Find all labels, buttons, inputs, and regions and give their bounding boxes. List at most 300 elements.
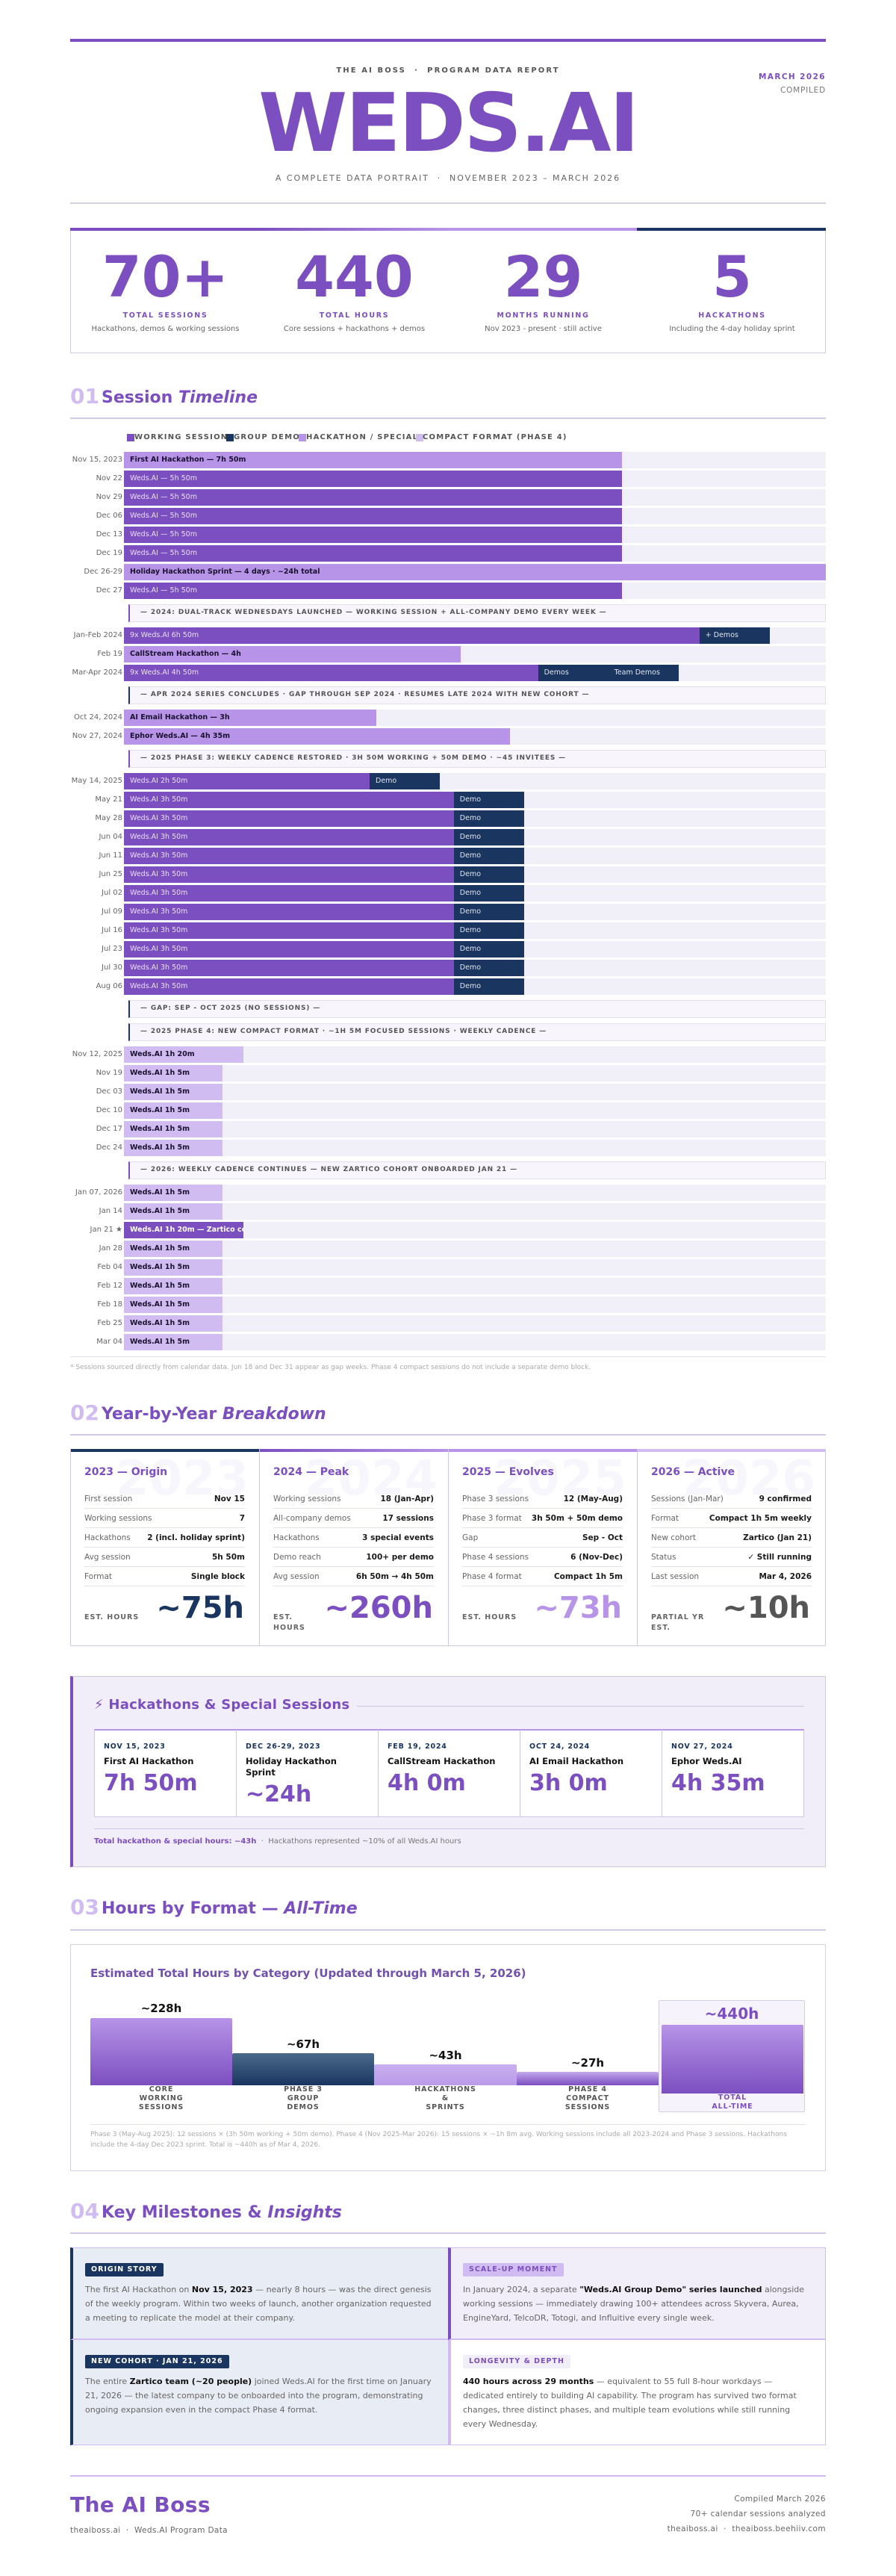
estimated hours label: EST. HOURS [84,1613,139,1621]
panel: 2023 origin: Avg session [84,1553,131,1562]
timeline row: Feb 12 [70,1278,826,1294]
body text: The entire Zartico team (~20 people) joined Weds.AI for the first time on January [85,2377,432,2386]
bar: total all-time: TOTAL [718,2094,747,2102]
timeline row: Nov 27, 2024: Nov 27, 2024 [72,732,122,740]
panel: 2024 peak: Avg session [273,1572,320,1581]
heading: section 04: Key Milestones & Insights [102,2203,342,2222]
bar: hackathons and sprints: ~43h [429,2049,462,2062]
timeline row: May 14, 2025 [72,773,826,789]
panel: 2024 peak: Working sessions [273,1495,341,1503]
card: first AI hackathon [94,1729,237,1817]
body text: a meeting to replicate the model at their company. [85,2313,295,2323]
tag [463,2263,564,2276]
panel: 2023 origin [70,1449,260,1646]
timeline row: Jul 16: Weds.AI 3h 50m [130,926,187,934]
card: ephor: NOV 27, 2024 [671,1742,733,1751]
panel: 2025 evolves [448,1449,638,1646]
timeline row: Jun 04: Weds.AI 3h 50m [130,833,187,841]
timeline row: Jan 21 [70,1222,826,1238]
timeline row: Dec 27: Weds.AI — 5h 50m [130,586,197,595]
timeline row: Jul 23: Weds.AI 3h 50m [130,945,187,953]
tag: ORIGIN STORY [91,2265,158,2274]
timeline row: Jun 11 [99,848,826,864]
estimated hours value: ~10h [722,1591,810,1625]
timeline row: Jun 25: Jun 25 [99,870,122,878]
stat: hackathons: 5 [712,243,752,310]
timeline row: Jul 16 [102,922,826,939]
card title: 2023 — Origin [84,1466,167,1478]
timeline row: Jun 04: Jun 04 [99,833,122,841]
timeline row: Feb 04: Feb 04 [97,1263,122,1271]
bar: core working sessions: WORKING [140,2094,183,2102]
phase note: 2025 gap: — GAP: SEP - OCT 2025 (NO SESSIONS) — [140,1005,320,1012]
subtitle: A COMPLETE DATA PORTRAIT · NOVEMBER 2023 – MARCH 2026 [276,173,620,183]
panel: 2026 active: ✓ Still running [747,1553,812,1562]
timeline row: Jun 11: Demo [460,851,481,860]
legend: HACKATHON / SPECIAL [306,433,418,441]
timeline row: Feb 18: Feb 18 [97,1300,122,1309]
bar: hackathons and sprints: HACKATHONS [414,2085,476,2094]
timeline row: Jan 07, 2026: Weds.AI 1h 5m [130,1188,190,1197]
insight: longevity and depth [448,2340,826,2445]
chart title: Estimated Total Hours by Category (Updated through March 5, 2026) [90,1967,526,1980]
timeline row: Jun 11: Jun 11 [99,851,122,860]
heading: section 01: Session Timeline [102,388,258,407]
panel: 2026 active: Mar 4, 2026 [759,1572,812,1581]
body text [463,2374,797,2431]
timeline row: Dec 19: Dec 19 [96,549,122,557]
timeline row: Dec 06 [96,508,826,524]
panel: 2026 active: Format [651,1514,679,1523]
timeline row: Mar 04 [70,1334,826,1350]
body text [85,2374,432,2417]
timeline row: Jan 07, 2026: Jan 07, 2026 [75,1188,122,1197]
timeline row: Nov 27, 2024: Ephor Weds.AI — 4h 35m [130,732,230,740]
timeline row: Jun 25: Demo [460,870,481,878]
body text: ongoing expansion even in the compact Phase 4 format. [85,2405,317,2415]
timeline row: Nov 15, 2023 [72,452,826,468]
timeline row: Jul 02 [102,885,826,901]
panel: 2026 active: New cohort [651,1533,696,1542]
heading: section 04 [70,2197,826,2226]
body text: EngineYard, TelcoDR, Totogi, and Influitive every single week. [463,2313,715,2323]
legend: WORKING SESSION [134,433,228,441]
timeline row: Jul 02: Weds.AI 3h 50m [130,889,187,897]
timeline row: Oct 24, 2024: Oct 24, 2024 [74,713,122,721]
panel: 2023 origin: 7 [240,1514,245,1523]
timeline row: Jan-Feb 2024 [73,627,826,644]
timeline row: Dec 17: Dec 17 [96,1125,122,1133]
timeline row: Jan 28 [70,1241,826,1257]
card title: 2026 — Active [651,1466,735,1478]
panel: 2023 origin: Hackathons [84,1533,131,1542]
card: AI email: AI Email Hackathon [529,1756,623,1766]
panel: 2023 origin: First session [84,1495,132,1503]
card: holiday sprint: Sprint [246,1767,276,1778]
tag [85,2355,229,2368]
timeline row: Jul 16: Jul 16 [102,926,122,934]
insight: scale-up moment [448,2247,826,2340]
stat: total hours: Core sessions + hackathons + demos [284,325,425,333]
panel: 2024 peak: 100+ per demo [366,1553,434,1562]
phase note: phase 3: — 2025 PHASE 3: WEEKLY CADENCE RESTORED · 3H 50M WORKING + 50M DEMO · ~45 INVITEES — [140,754,566,762]
body text [463,2282,804,2325]
stat: hackathons: Including the 4-day holiday sprint [669,325,795,333]
bar: core working sessions: CORE [149,2085,173,2094]
heading: section 01 [70,384,258,409]
stat: total sessions: 70+ [102,243,228,310]
timeline row: Dec 06: Weds.AI — 5h 50m [130,512,197,520]
timeline row: Dec 17: Weds.AI 1h 5m [130,1125,190,1133]
stat: total hours: TOTAL HOURS [320,311,389,320]
footer brand: The AI Boss [70,2492,211,2517]
stat: total hours: 440 [295,243,414,310]
body text: The first AI Hackathon on Nov 15, 2023 — nearly 8 hours — was the direct genesis [85,2285,432,2294]
heading: section 02: Year-by-Year Breakdown [102,1405,326,1424]
timeline row: Jul 23: Jul 23 [102,945,122,953]
panel: 2024 peak: 17 sessions [382,1514,434,1523]
panel: 2025 evolves: Compact 1h 5m [554,1572,623,1581]
date stamp [759,72,826,95]
panel: hours chart [70,1944,826,2171]
timeline row: Dec 13: Dec 13 [96,530,122,539]
timeline row: Jun 11: Weds.AI 3h 50m [130,851,187,860]
footer divider [70,2475,826,2477]
panel: 2025 evolves: Sep - Oct [582,1533,623,1542]
panel: 2025 evolves: 3h 50m + 50m demo [532,1514,623,1523]
panel summary [94,1828,804,1851]
panel: 2025 evolves: Phase 3 sessions [462,1495,529,1503]
card: holiday sprint: Holiday Hackathon [246,1756,337,1766]
panel: 2026 active: 9 confirmed [759,1495,812,1503]
card: callstream: FEB 19, 2024 [388,1742,447,1751]
timeline row: Nov 19 [96,1065,826,1081]
panel: 2023 origin: 5h 50m [212,1553,245,1562]
card: first AI hackathon: First AI Hackathon [104,1756,193,1766]
estimated hours label [651,1613,704,1633]
timeline row: Dec 24: Dec 24 [96,1143,122,1152]
card: holiday sprint: DEC 26-29, 2023 [246,1742,320,1751]
timeline row: Aug 06: Aug 06 [96,982,122,990]
timeline row: Nov 29: Nov 29 [96,493,122,501]
timeline row: May 28: May 28 [95,814,122,822]
phase note: phase 4 [128,1023,826,1041]
timeline row: Jan-Feb 2024: 9x Weds.AI 6h 50m [130,631,199,639]
panel: 2024 peak: All-company demos [273,1514,351,1523]
timeline row: Jan 28: Weds.AI 1h 5m [130,1244,190,1253]
timeline row: Jul 09: Jul 09 [102,907,122,916]
card title: 2025 — Evolves [462,1466,554,1478]
phase note: 2024: — 2024: DUAL-TRACK WEDNESDAYS LAUNCHED — WORKING SESSION + ALL-COMPANY DEMO EVERY WEEK — [140,609,607,616]
timeline row: Jan-Feb 2024: Jan-Feb 2024 [74,631,122,639]
timeline row: Mar-Apr 2024: Demos [544,668,569,677]
timeline row: Feb 18: Weds.AI 1h 5m [130,1300,190,1309]
timeline row: Dec 17 [96,1121,826,1138]
bar: phase 4 compact sessions: ~27h [571,2056,604,2070]
legend: GROUP DEMO [234,433,300,441]
stat: total sessions: TOTAL SESSIONS [123,311,208,320]
bar: hackathons and sprints: SPRINTS [426,2103,465,2111]
stats top accent bar [70,228,826,231]
timeline row: Oct 24, 2024: AI Email Hackathon — 3h [130,713,230,721]
timeline row: Jul 02: Jul 02 [102,889,122,897]
timeline row: Nov 29 [96,489,826,506]
body text: 440 hours across 29 months — equivalent to 55 full 8-hour workdays — [463,2377,772,2386]
timeline row: Nov 12, 2025: Weds.AI 1h 20m [130,1050,195,1058]
timeline row: Jun 04 [99,829,826,845]
legend: COMPACT FORMAT (PHASE 4) [423,433,567,441]
timeline row: Jul 30: Jul 30 [102,963,122,972]
bar: core working sessions [90,1999,232,2111]
timeline row: Mar-Apr 2024: 9x Weds.AI 4h 50m [130,668,199,677]
watermark year: 2025 [494,1451,626,1506]
bar: core working sessions: SESSIONS [139,2103,184,2111]
timeline row: May 28: Demo [460,814,481,822]
tag: SCALE-UP MOMENT [469,2265,558,2274]
heading: section 01: 01 [70,384,99,409]
bar: phase 4 compact sessions: COMPACT [566,2094,609,2102]
tag: NEW COHORT · JAN 21, 2026 [91,2357,223,2365]
timeline row: Dec 06: Dec 06 [96,512,122,520]
timeline row: Dec 27: Dec 27 [96,586,122,595]
timeline row: Dec 24: Weds.AI 1h 5m [130,1143,190,1152]
panel: 2026 active: Compact 1h 5m weekly [709,1514,812,1523]
body text: every Wednesday. [463,2419,538,2429]
stat: total sessions: Hackathons, demos & working sessions [92,325,239,333]
timeline row: Aug 06 [96,978,826,995]
phase note: 2024 [128,604,826,622]
timeline row: Jul 23: Demo [460,945,481,953]
timeline row: May 28 [95,810,826,827]
card: first AI hackathon: 7h 50m [104,1770,198,1796]
timeline row: May 28: Weds.AI 3h 50m [130,814,187,822]
card: callstream: 4h 0m [388,1770,466,1796]
footer meta: theaiboss.ai · theaiboss.beehiiv.com [668,2524,826,2533]
footer meta: Compiled March 2026 [734,2495,826,2504]
timeline row: Jun 25: Weds.AI 3h 50m [130,870,187,878]
bar: hackathons and sprints: & [442,2094,449,2102]
bar: total all-time [659,2000,805,2112]
phase note: 2026 [128,1161,826,1179]
card: AI email: 3h 0m [529,1770,608,1796]
body text: of the weekly program. Within two weeks of launch, another organization requested [85,2299,432,2309]
panel: 2025 evolves: 6 (Nov-Dec) [570,1553,623,1562]
panel: 2026 active: Status [651,1553,676,1562]
timeline row: Jul 16: Demo [460,926,481,934]
tag [463,2355,570,2368]
estimated hours value: ~73h [534,1591,622,1625]
timeline row: May 14, 2025: Demo [376,777,396,785]
heading: section 03: 03 [70,1895,99,1919]
stat: total hours [284,243,425,333]
timeline row: Aug 06: Demo [460,982,481,990]
card: callstream [378,1729,520,1817]
card: holiday sprint [236,1729,379,1817]
timeline row: Feb 25: Feb 25 [97,1319,122,1327]
panel: 2023 origin: Single block [191,1572,245,1581]
timeline row: Nov 19: Nov 19 [96,1069,122,1077]
panel summary: Total hackathon & special hours: ~43h · Hackathons represented ~10% of all Weds.AI hours [94,1837,461,1846]
timeline row: Oct 24, 2024 [74,710,826,726]
bar: core working sessions: ~228h [141,2002,181,2015]
bar: total all-time: ALL-TIME [712,2102,753,2111]
timeline row: Dec 26-29 [84,564,826,580]
watermark year: 2026 [682,1451,815,1506]
panel: 2024 peak [259,1449,449,1646]
panel: 2023 origin: Format [84,1572,112,1581]
phase note: gap: — APR 2024 SERIES CONCLUDES · GAP THROUGH SEP 2024 · RESUMES LATE 2024 WITH NEW COHORT — [140,691,589,698]
timeline footnote: * Sessions sourced directly from calendar data. Jun 18 and Dec 31 appear as gap weeks. Phase 4 compact sessions do not include a separate demo block. [70,1364,591,1371]
panel: headline stats [70,228,826,353]
title: WEDS.AI [258,77,638,170]
stat: total sessions [92,243,239,333]
heading: section 04: 04 [70,2199,99,2223]
panel: 2023 origin: 2 (incl. holiday sprint) [147,1533,245,1542]
panel: 2026 active: Zartico (Jan 21) [743,1533,812,1542]
timeline row: Dec 03: Dec 03 [96,1087,122,1096]
panel: 2024 peak: Hackathons [273,1533,320,1542]
panel: 2026 active: Last session [651,1572,699,1581]
body text: In January 2024, a separate "Weds.AI Group Demo" series launched alongside [463,2285,804,2294]
bar: phase 4 compact sessions: SESSIONS [565,2103,610,2111]
timeline row: Jun 25 [99,866,826,883]
timeline row: Feb 19: Feb 19 [97,650,122,658]
bar: phase 4 compact sessions: PHASE 4 [568,2085,607,2094]
eyebrow: report label: THE AI BOSS · PROGRAM DATA REPORT [336,66,560,75]
timeline row: Feb 04 [70,1259,826,1276]
bar: phase 4 compact sessions [517,1999,659,2111]
stat: hackathons [669,243,795,333]
legend [127,433,567,441]
timeline footnote [70,1356,826,1374]
top accent rule [70,39,826,42]
timeline row: Feb 12: Feb 12 [97,1282,122,1290]
timeline row: May 14, 2025: May 14, 2025 [72,777,122,785]
panel: 2024 peak: Demo reach [273,1553,321,1562]
heading: section 03 [70,1893,826,1922]
timeline row: Nov 22: Nov 22 [96,474,122,482]
timeline row: May 14, 2025: Weds.AI 2h 50m [130,777,187,785]
timeline row: Nov 22 [96,471,826,487]
stat: months running: 29 [504,243,582,310]
heading: section 03: Hours by Format — All-Time [102,1899,358,1918]
tag: LONGEVITY & DEPTH [469,2357,564,2365]
body text [85,2282,432,2325]
timeline row: Dec 10: Dec 10 [96,1106,122,1114]
timeline row: Nov 15, 2023: Nov 15, 2023 [72,456,122,464]
chart footnote [90,2124,806,2157]
timeline row: Jan 21: Jan 21 ★ [90,1226,122,1234]
panel: 2023 origin: Nov 15 [214,1495,245,1503]
panel heading: ⚡ Hackathons & Special Sessions [94,1697,349,1713]
panel: 2024 peak: 18 (Jan-Apr) [380,1495,434,1503]
timeline row: Jul 30 [102,960,826,976]
timeline row: Nov 19: Weds.AI 1h 5m [130,1069,190,1077]
timeline row: Dec 19 [96,545,826,562]
timeline row: Dec 19: Weds.AI — 5h 50m [130,549,197,557]
timeline row: Jan 07, 2026 [75,1185,826,1201]
timeline row: Nov 12, 2025: Nov 12, 2025 [72,1050,122,1058]
timeline row: Mar 04: Mar 04 [96,1338,122,1346]
timeline row: Jan 28: Jan 28 [99,1244,122,1253]
panel: 2025 evolves: Phase 3 format [462,1514,522,1523]
timeline row: Jan 14 [99,1203,826,1220]
chart footnote: Phase 3 (May-Aug 2025): 12 sessions × (3h 50m working + 50m demo). Phase 4 (Nov 2025-Mar 2026): 15 sessions × ~1h 8m avg. Working sessions include all 2023-2024 and Phase 3 sessions. Hackathons [90,2131,787,2138]
timeline row: Feb 19 [97,646,826,662]
panel: 2024 peak: 6h 50m → 4h 50m [356,1572,434,1581]
phase note: phase 3 [128,750,826,768]
timeline row: Dec 10: Weds.AI 1h 5m [130,1106,190,1114]
stat: hackathons: HACKATHONS [698,311,766,320]
insight: new cohort [70,2340,448,2445]
date stamp: COMPILED [780,86,826,95]
card: callstream: CallStream Hackathon [388,1756,495,1766]
timeline row: Dec 03 [96,1084,826,1100]
bar: hackathons and sprints [374,1999,517,2111]
timeline row: Jun 04: Demo [460,833,481,841]
timeline row: May 21 [95,792,826,808]
timeline row: Jan 14: Jan 14 [99,1207,122,1215]
estimated hours value: ~75h [156,1591,244,1625]
timeline row: Jul 09: Weds.AI 3h 50m [130,907,187,916]
timeline row: Nov 29: Weds.AI — 5h 50m [130,493,197,501]
timeline row: Mar-Apr 2024: Team Demos [615,668,660,677]
hackathon cards [94,1729,804,1817]
phase note: 2026: — 2026: WEEKLY CADENCE CONTINUES — NEW ZARTICO COHORT ONBOARDED JAN 21 — [140,1166,517,1173]
timeline row: Feb 25: Weds.AI 1h 5m [130,1319,190,1327]
insight: origin story [70,2247,448,2340]
header divider [70,202,826,204]
body text: 21, 2026 — the latest company to be onboarded into the program, demonstrating [85,2391,423,2400]
estimated hours value: ~260h [324,1591,433,1625]
watermark year: 2023 [116,1451,249,1506]
timeline row: Feb 18 [70,1297,826,1313]
panel: 2023 origin: Working sessions [84,1514,152,1523]
stat: months running: MONTHS RUNNING [497,311,590,320]
tag [85,2263,164,2276]
estimated hours label: EST. [651,1624,671,1632]
panel: 2024 peak: 3 special events [362,1533,434,1542]
phase note: gap [128,686,826,704]
estimated hours label: EST. HOURS [462,1613,517,1621]
card: holiday sprint: ~24h [246,1781,311,1807]
footer meta [527,2492,826,2536]
panel: key milestones grid [70,2247,826,2445]
timeline row: Jul 09 [102,904,826,920]
timeline row: Nov 27, 2024 [72,728,826,745]
stat: months running [485,243,602,333]
estimated hours label: PARTIAL YR [651,1613,704,1621]
timeline row: May 21: Weds.AI 3h 50m [130,795,187,804]
panel: 2025 evolves: 12 (May-Aug) [564,1495,623,1503]
bar chart [90,1999,807,2113]
bar: phase 3 group demos [232,1999,374,2111]
heading: section 02 [70,1398,826,1428]
footer brand: theaiboss.ai · Weds.AI Program Data [70,2526,228,2535]
timeline row: Nov 22: Weds.AI — 5h 50m [130,474,197,482]
timeline row: Feb 19: CallStream Hackathon — 4h [130,650,241,658]
timeline row: Jan 14: Weds.AI 1h 5m [130,1207,190,1215]
stat: months running: Nov 2023 - present · still active [485,325,602,333]
timeline row: Jul 23 [102,941,826,958]
timeline row: Dec 13 [96,527,826,543]
heading: section 02: 02 [70,1400,99,1425]
watermark year: 2024 [305,1451,438,1506]
footer meta: 70+ calendar sessions analyzed [691,2510,826,2518]
phase note: phase 4: — 2025 PHASE 4: NEW COMPACT FORMAT · ~1H 5M FOCUSED SESSIONS · WEEKLY CADENCE — [140,1028,547,1035]
phase note: 2025 gap [128,1000,826,1018]
estimated hours label [273,1613,305,1633]
